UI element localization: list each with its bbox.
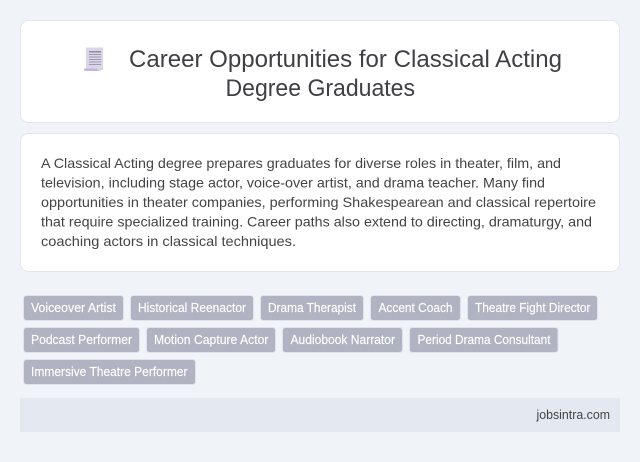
tag: Podcast Performer (24, 328, 140, 352)
description text: that require specialized training. Career paths also extend to directing, dramaturgy, and (41, 214, 592, 230)
description text (41, 155, 596, 249)
tag: Accent Coach (370, 296, 460, 320)
tag: Historical Reenactor: Historical Reenactor (138, 300, 247, 315)
title: Career Opportunities for Classical Acting (129, 46, 562, 73)
description text: television, including stage actor, voice-over artist, and drama teacher. Many find (41, 174, 545, 190)
footer (20, 398, 620, 432)
panel: description (20, 134, 620, 272)
tag: Drama Therapist (260, 296, 364, 320)
tag: Podcast Performer: Podcast Performer (31, 332, 133, 347)
description text: A Classical Acting degree prepares graduates for diverse roles in theater, film, and (41, 155, 561, 171)
tag group: career roles (24, 296, 598, 384)
tag: Drama Therapist: Drama Therapist (268, 300, 356, 315)
description text: coaching actors in classical techniques. (41, 233, 296, 249)
tag: Immersive Theatre Performer: Immersive Theatre Performer (31, 364, 188, 379)
tag: Period Drama Consultant: Period Drama Consultant (418, 332, 551, 347)
tag: Voiceover Artist: Voiceover Artist (31, 300, 116, 315)
title: Degree Graduates (226, 75, 415, 102)
tag: Historical Reenactor (130, 296, 254, 320)
icon: paper scroll (84, 48, 103, 71)
tag: Accent Coach: Accent Coach (378, 300, 452, 315)
tag: Voiceover Artist (24, 296, 124, 320)
tag: Audiobook Narrator (282, 328, 402, 352)
description text: opportunities in theater companies, performing Shakespearean and classical repertoire (41, 194, 596, 210)
tag: Motion Capture Actor: Motion Capture Actor (154, 332, 269, 347)
tag: Immersive Theatre Performer (24, 360, 196, 384)
tag: Theatre Fight Director: Theatre Fight Director (475, 300, 591, 315)
panel: header (20, 20, 620, 122)
tag: Theatre Fight Director (468, 296, 598, 320)
tag: Audiobook Narrator: Audiobook Narrator (290, 332, 396, 347)
footer source text: jobsintra.com (536, 407, 610, 422)
title (129, 46, 562, 102)
tag: Motion Capture Actor (146, 328, 276, 352)
tag: Period Drama Consultant (410, 328, 558, 352)
